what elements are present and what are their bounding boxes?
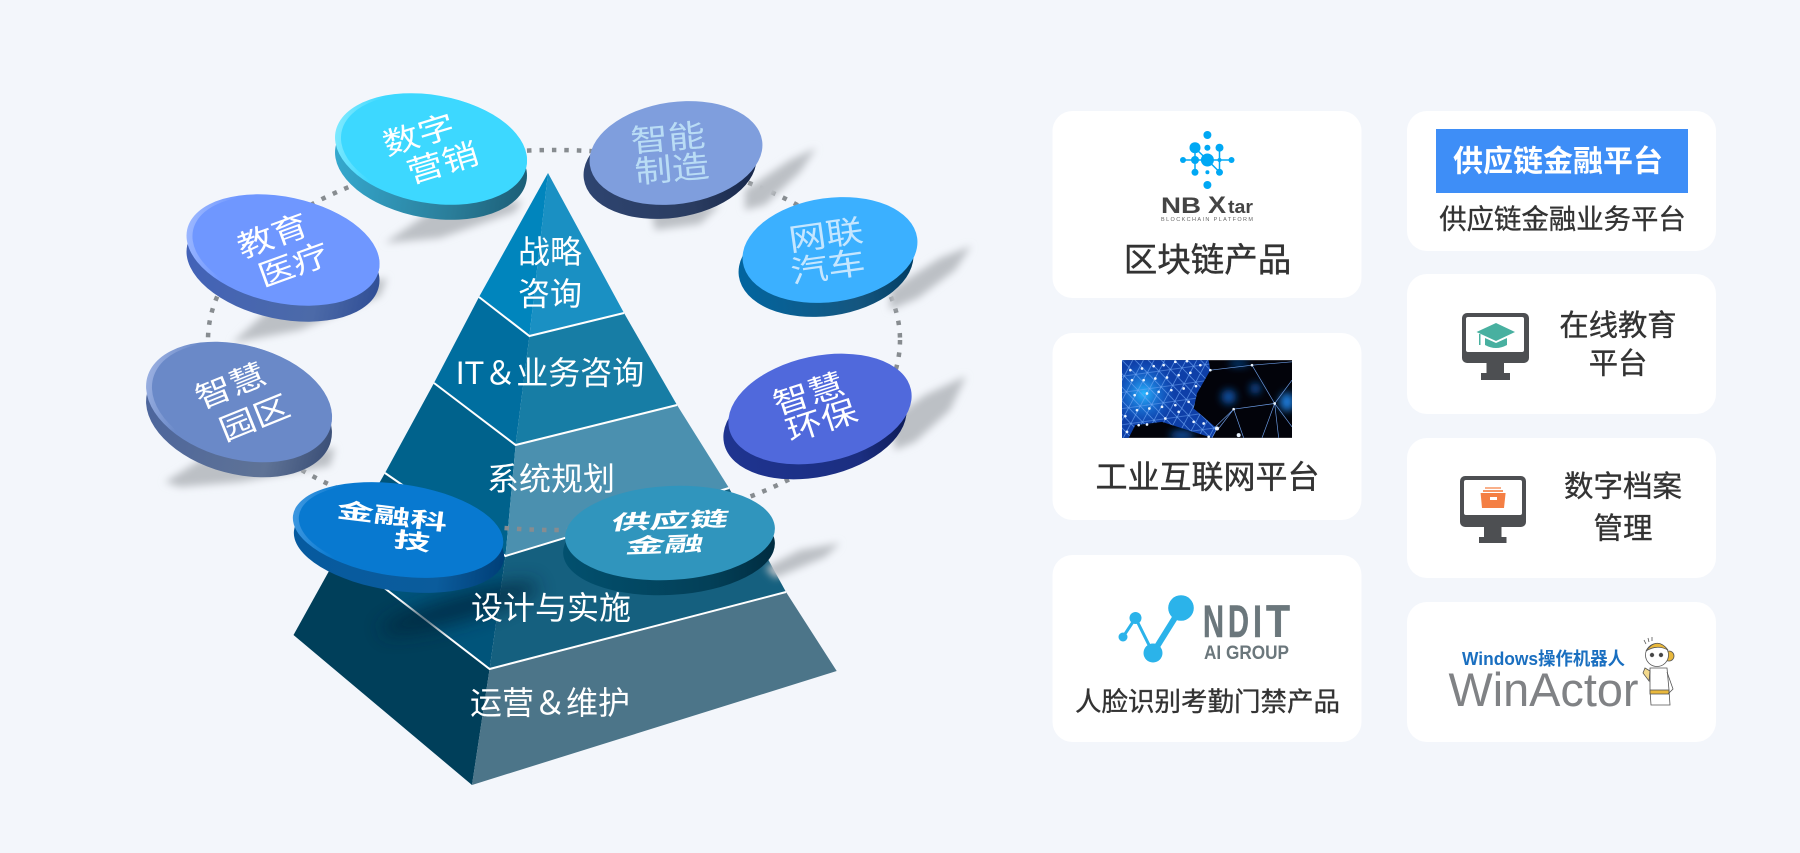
disc: smart park [132, 322, 346, 497]
disc: digital marketing [326, 79, 536, 234]
tier labels: 系统规划 [487, 461, 615, 497]
label: 环保 [782, 395, 862, 449]
label: 金融科 [336, 498, 449, 535]
card label: 人脸识别考勤门禁产品 [1075, 687, 1340, 717]
tier labels: IT＆业务咨询 [456, 355, 644, 391]
card: industrial internet platform [1052, 333, 1362, 520]
logo text: NDIT: T [1266, 596, 1290, 647]
card label: 供应链金融业务平台 [1439, 204, 1686, 234]
banner: 供应链金融平台 [1453, 144, 1663, 178]
card label [1564, 470, 1682, 546]
banner [1436, 129, 1688, 193]
label: 汽车 [789, 246, 867, 290]
label [191, 357, 295, 448]
disc: supply chain finance [561, 481, 777, 600]
card label [1559, 310, 1677, 380]
tier separators [339, 297, 786, 669]
logo text: NDIT: N [1203, 596, 1224, 647]
tier 1: strategy consulting [479, 173, 624, 336]
tier 5: operations and maintenance [294, 553, 837, 785]
tier 4: design and implementation [339, 473, 786, 669]
label: 金融 [623, 532, 707, 558]
label: 数字 [379, 108, 459, 163]
dotted ring [208, 150, 900, 530]
tier labels: 战略 [518, 234, 582, 270]
tier 3: system planning [385, 383, 729, 556]
label: 营销 [403, 136, 483, 191]
label [787, 214, 867, 290]
label: 医疗 [254, 237, 334, 294]
logo text: AI GROUP: AI GROUP [1204, 642, 1289, 664]
card label: 数字档案 [1564, 470, 1682, 504]
label: 网联 [787, 214, 865, 258]
label [336, 498, 449, 556]
disc 7 cast shadow on pyramid [377, 572, 543, 644]
card label: 工业互联网平台 [1095, 459, 1320, 495]
icon: monitor with graduation cap [1462, 313, 1529, 380]
label [379, 108, 483, 191]
label: 智慧 [769, 367, 849, 422]
disc: connected vehicles [732, 186, 924, 328]
card label: 在线教育 [1559, 310, 1677, 342]
label [769, 367, 862, 449]
card: face recognition attendance [1052, 555, 1362, 742]
label: 技 [392, 527, 432, 556]
label [233, 208, 334, 294]
disc shadows [165, 148, 971, 578]
card: WinActor [1407, 602, 1716, 742]
label: 教育 [233, 208, 313, 265]
card: blockchain product [1052, 111, 1362, 298]
card label: 管理 [1593, 512, 1653, 546]
card label: 区块链产品 [1124, 242, 1291, 280]
disc: fintech [287, 470, 510, 605]
card: digital archive management [1407, 438, 1716, 578]
blue caption: Windows操作机器人 [1462, 649, 1625, 669]
tier labels: 运营＆维护 [470, 685, 630, 721]
logo text: NDIT: D [1228, 596, 1249, 647]
pyramid [294, 173, 837, 785]
card: online education platform [1407, 274, 1716, 414]
tier 2: IT and business consulting [434, 297, 677, 445]
logo text: NDIT [1203, 596, 1290, 647]
icon: monitor with archive box [1460, 476, 1526, 543]
label: 供应链 [609, 508, 731, 534]
logo text: NBXtar: X [1208, 192, 1226, 219]
tier labels: 设计与实施 [471, 590, 631, 626]
icon: NDIT line mark [1118, 595, 1194, 662]
image: network visual [1122, 360, 1292, 438]
label: 智能 [629, 119, 707, 159]
tier labels: 咨询 [518, 276, 582, 312]
logo subtitle: BLOCKCHAIN PLATFORM [1161, 217, 1253, 223]
label: 智慧 [191, 357, 271, 416]
label [629, 119, 711, 190]
logo text: NBXtar: tar [1228, 197, 1253, 217]
logo text: WinActor: WinActor [1448, 663, 1638, 716]
icon: NBXtar network [1180, 131, 1234, 189]
logo text: NDIT: I [1253, 596, 1262, 647]
label: 制造 [633, 150, 711, 190]
icon: robot mascot [1643, 637, 1674, 705]
card label: 平台 [1589, 348, 1647, 380]
disc: smart environment [713, 338, 922, 495]
disc: smart manufacturing [577, 90, 769, 230]
logo text: NBXtar [1161, 192, 1253, 219]
card: supply chain finance platform [1407, 111, 1716, 251]
disc: education and healthcare [176, 178, 390, 338]
logo text: NBXtar: NB [1161, 193, 1201, 218]
tier labels [456, 234, 644, 721]
label: 园区 [215, 390, 295, 448]
label [609, 508, 731, 558]
